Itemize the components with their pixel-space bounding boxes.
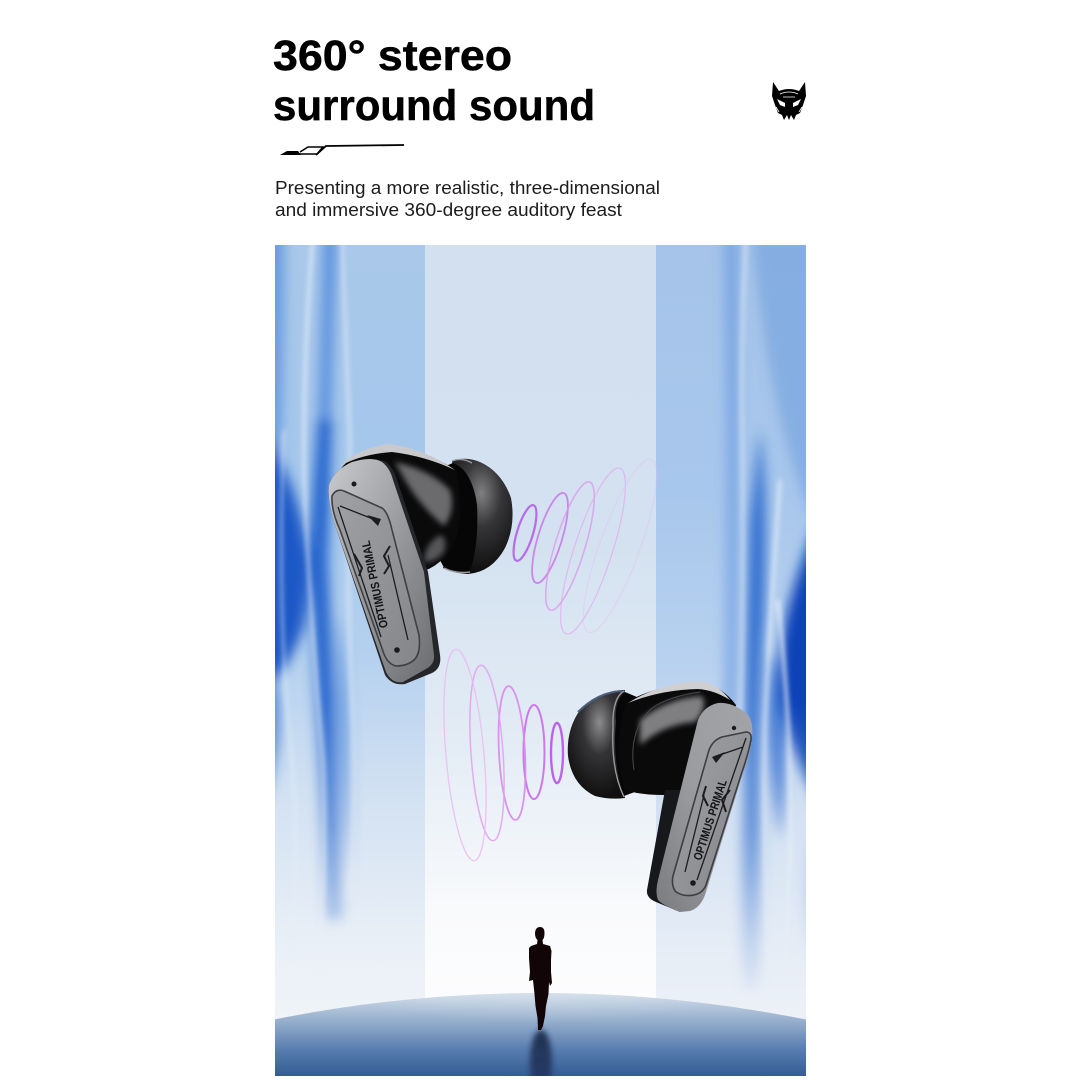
figure silhouette bbox=[529, 927, 552, 1030]
divider ornament bbox=[280, 145, 404, 155]
figure reflection bbox=[530, 1030, 552, 1080]
screws bbox=[690, 726, 736, 886]
background: left side strip bbox=[275, 245, 426, 1076]
title: 360° stereo bbox=[273, 32, 512, 80]
icon: brand mask logo bbox=[772, 82, 806, 120]
stem inner panel bbox=[332, 490, 420, 666]
description text: Presenting a more realistic, three-dimensional bbox=[275, 178, 660, 198]
eartip bbox=[430, 459, 513, 574]
ground dome bbox=[275, 993, 806, 1076]
text: OPTIMUS PRIMAL: OPTIMUS PRIMAL bbox=[691, 778, 730, 862]
description text bbox=[275, 178, 660, 220]
stem plate bbox=[656, 703, 752, 912]
earbud glossy body bbox=[335, 445, 460, 571]
stem markings bbox=[685, 738, 746, 880]
stem inner panel bbox=[672, 732, 751, 896]
background: right curtain folds bbox=[718, 245, 806, 986]
earbud: upper left bbox=[329, 444, 513, 684]
sound waves: upper group bbox=[509, 453, 670, 640]
earbud glossy body bbox=[619, 682, 736, 800]
panel: hero image bbox=[262, 230, 822, 1080]
title bbox=[273, 32, 595, 130]
screws bbox=[352, 482, 400, 653]
background: centre light column bbox=[425, 245, 656, 1076]
background: right side strip bbox=[656, 245, 806, 1076]
stem plate back bbox=[647, 790, 710, 912]
description text: and immersive 360-degree auditory feast bbox=[275, 200, 622, 220]
stem markings bbox=[338, 506, 408, 640]
gloss highlights bbox=[628, 681, 730, 770]
stem plate bbox=[329, 459, 440, 684]
background: left curtain folds bbox=[275, 245, 355, 926]
earbud: lower right bbox=[568, 681, 752, 912]
sound waves: lower group bbox=[437, 648, 563, 862]
text: OPTIMUS PRIMAL: OPTIMUS PRIMAL bbox=[359, 539, 391, 629]
eartip bbox=[568, 690, 644, 799]
gloss highlights bbox=[340, 444, 455, 562]
title: surround sound bbox=[273, 82, 595, 130]
